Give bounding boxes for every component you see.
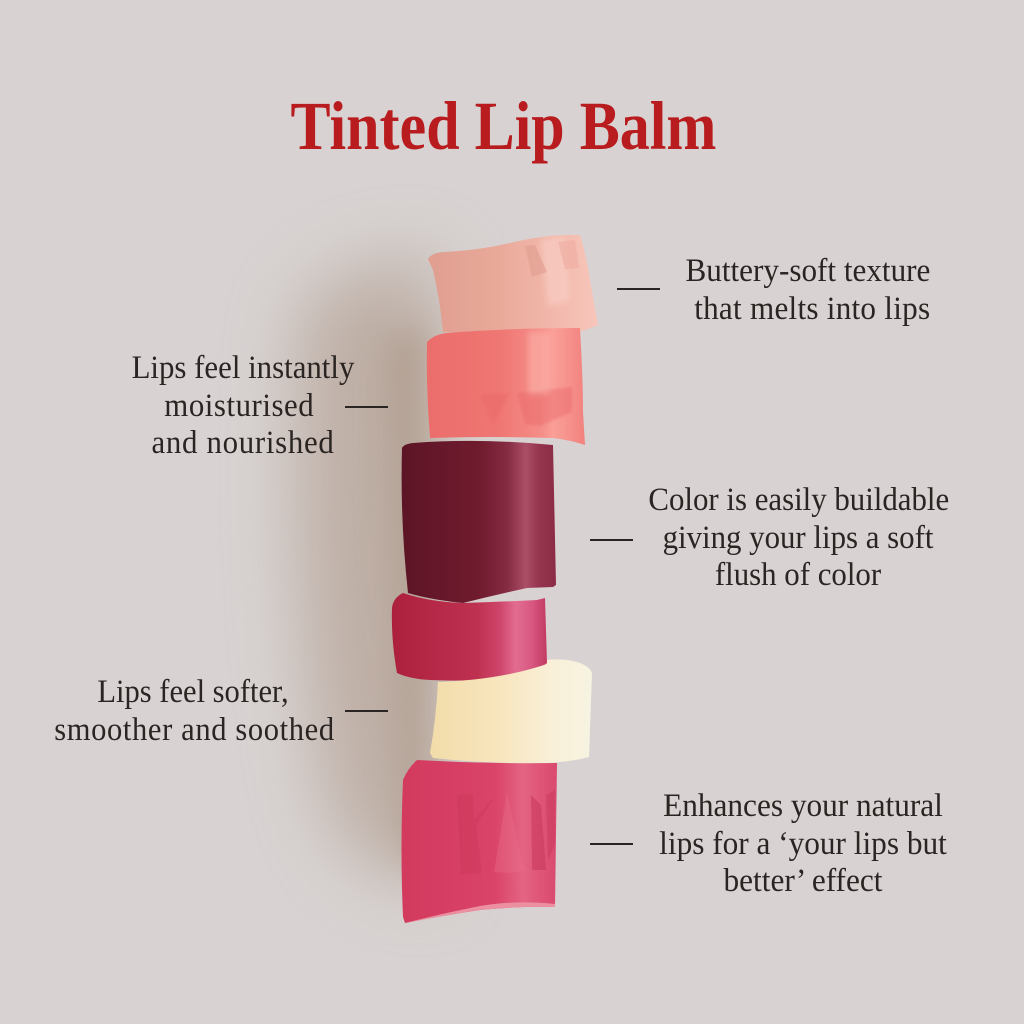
callout text (132, 350, 354, 461)
callout text (685, 253, 930, 326)
leader line (345, 406, 388, 408)
balm 3: dark berry (402, 441, 556, 603)
callout text: Buttery-soft texture (685, 253, 930, 289)
callout text: Enhances your natural (663, 788, 943, 824)
callout text (659, 788, 947, 899)
cast shadow (296, 259, 440, 890)
leader line (590, 843, 633, 844)
balm 5: cream (430, 659, 592, 763)
balm 4: raspberry (392, 593, 547, 681)
leader line (590, 539, 633, 540)
callout text: better’ effect (724, 863, 882, 899)
callout text: smoother and soothed (54, 712, 335, 748)
embossed logo (457, 790, 555, 874)
callout: buildable color (590, 482, 949, 593)
callout text: that melts into lips (694, 290, 930, 326)
callout text: lips for a ‘your lips but (659, 826, 947, 862)
callout: buttery-soft texture (617, 253, 930, 326)
balm 2: coral (427, 328, 585, 445)
balm 6: rose embossed (402, 760, 557, 923)
callout text: Lips feel instantly (132, 350, 354, 386)
callout: softer lips (54, 674, 388, 748)
callout text (54, 674, 335, 748)
callout text (648, 482, 949, 593)
leader line (345, 710, 388, 712)
balm 1: pale pink (428, 235, 598, 334)
leader line (617, 288, 660, 290)
callout text: and nourished (152, 425, 334, 461)
callout text: giving your lips a soft (663, 520, 933, 556)
callout text: moisturised (164, 388, 314, 424)
callout text: Color is easily buildable (648, 482, 949, 518)
callout: natural lips (590, 788, 947, 899)
callout text: flush of color (715, 557, 881, 593)
callout: moisturised (132, 350, 388, 461)
callout text: Lips feel softer, (97, 674, 289, 710)
title: Tinted Lip Balm (291, 88, 716, 164)
